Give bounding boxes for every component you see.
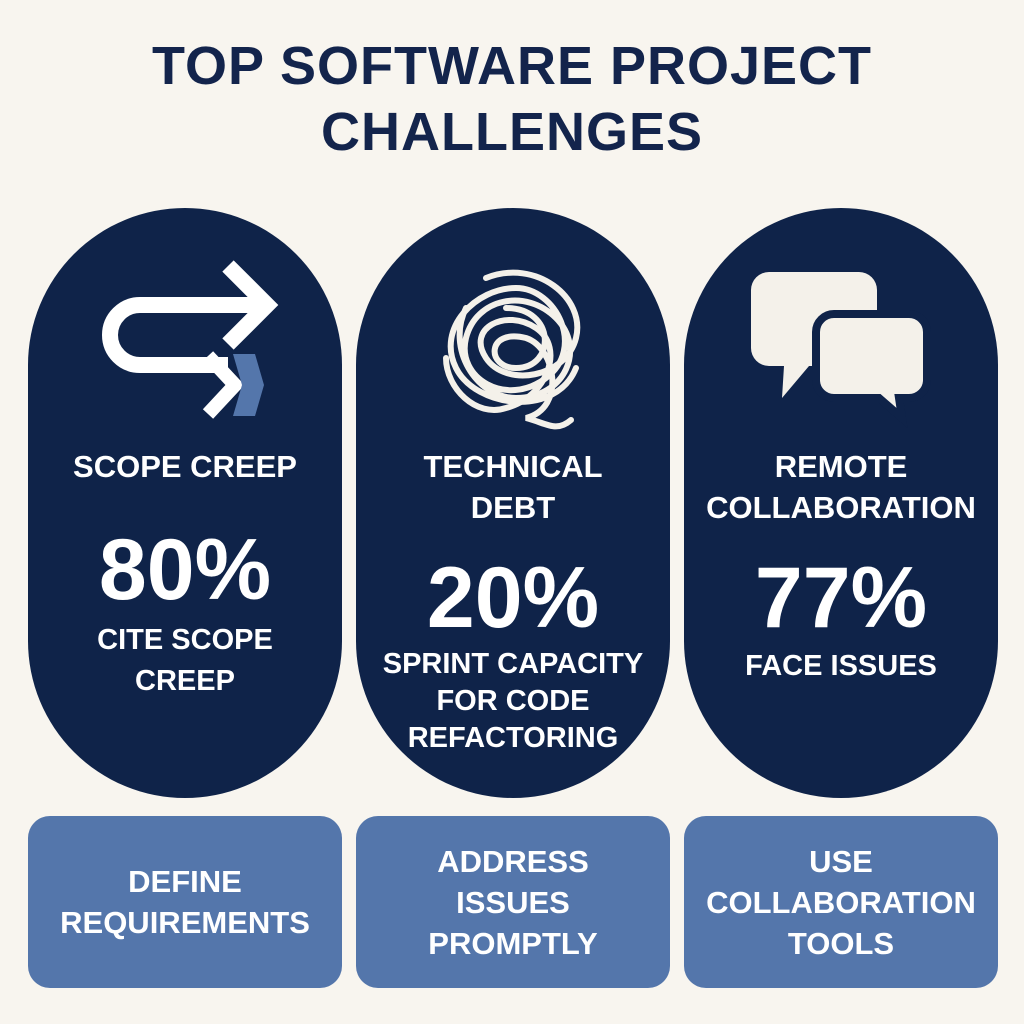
heading (706, 449, 976, 525)
heading: SCOPE CREEP (73, 449, 297, 484)
description: CITE SCOPE (97, 624, 273, 656)
title: CHALLENGES (321, 102, 703, 162)
description (383, 648, 643, 754)
stat: 77% (755, 550, 927, 646)
box: address issues: PROMPTLY (428, 926, 598, 960)
panel: scope creep (28, 208, 342, 798)
box: collaboration tools: COLLABORATION (706, 884, 976, 920)
box: address issues: ISSUES (456, 884, 570, 920)
description (97, 624, 273, 697)
description: CREEP (135, 665, 235, 697)
box: collaboration tools (684, 816, 998, 988)
description: REFACTORING (408, 722, 618, 754)
heading: COLLABORATION (706, 490, 976, 525)
heading (423, 449, 603, 525)
icon: arrows (102, 260, 278, 419)
stat: 80% (99, 522, 271, 618)
box: address issues (356, 816, 670, 988)
box: define requirements: DEFINE (128, 864, 242, 899)
panel: remote collaboration (684, 208, 998, 798)
icon: speech bubbles (751, 272, 923, 408)
box: define requirements: REQUIREMENTS (60, 905, 310, 940)
box: collaboration tools: TOOLS (788, 926, 894, 960)
description: SPRINT CAPACITY (383, 648, 643, 680)
description: FACE ISSUES (745, 650, 937, 682)
panel: technical debt (356, 208, 670, 798)
heading: DEBT (471, 490, 555, 525)
box: address issues: ADDRESS (437, 844, 589, 878)
heading: REMOTE (775, 449, 907, 484)
box: collaboration tools: USE (809, 844, 873, 878)
description: FOR CODE (436, 685, 590, 717)
icon: tangle (443, 270, 580, 430)
title: TOP SOFTWARE PROJECT (152, 36, 872, 96)
title (152, 36, 872, 162)
box: define requirements (28, 816, 342, 988)
stat: 20% (427, 550, 599, 646)
heading: TECHNICAL (423, 449, 603, 484)
